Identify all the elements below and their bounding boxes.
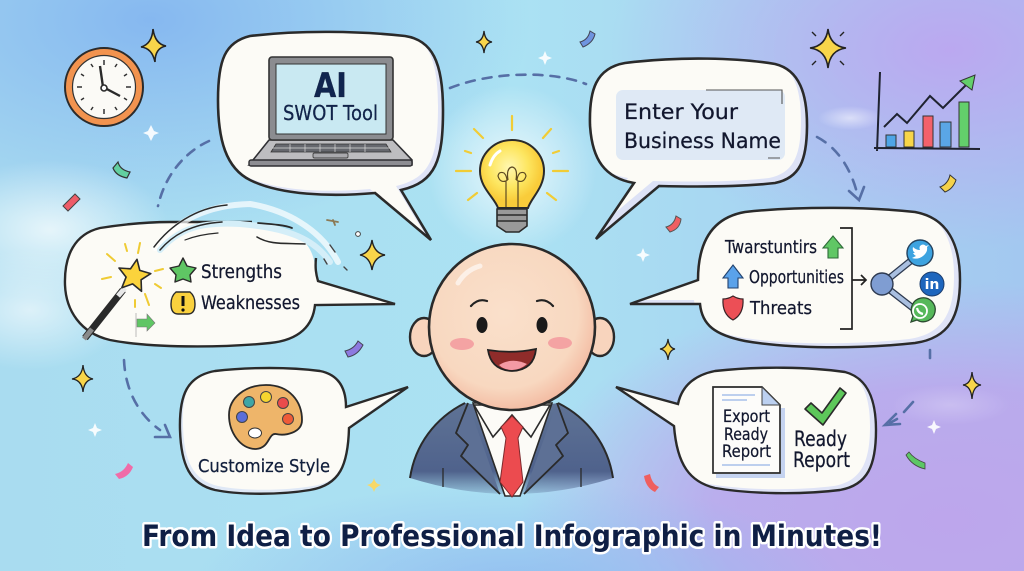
- icon: growth bar chart: [874, 72, 980, 151]
- icon: warning badge: [171, 292, 195, 314]
- face details: [450, 266, 572, 371]
- head: [429, 244, 595, 410]
- magic swoosh: [154, 204, 360, 270]
- label: Weaknesses: Weaknesses: [201, 292, 300, 314]
- label: Threats: Threats: [749, 298, 812, 319]
- icon: linkedin: in: [925, 277, 939, 293]
- panel: Strengths and Weaknesses bubble: [65, 204, 395, 346]
- panel: Export Ready Report bubble: [610, 364, 876, 493]
- panel: SWOT opportunities and threats bubble: [624, 204, 960, 347]
- icon: laptop: [249, 57, 412, 166]
- input field with name prompt: [616, 90, 785, 160]
- panel: Enter Your Business Name bubble: [584, 54, 807, 239]
- icon: share network: [871, 240, 944, 322]
- icon: report document: Export: [723, 407, 770, 427]
- connecting dashed arrows: [124, 75, 930, 437]
- icon: green check mark: [805, 388, 846, 425]
- garbled label text: Twarstuntirs: [724, 237, 817, 258]
- icon: blue up arrow: [723, 265, 743, 288]
- label: Opportunities: Opportunities: [749, 267, 844, 288]
- icon: green star: [170, 258, 196, 282]
- collar and red tie: [474, 405, 550, 497]
- icon: glowing light bulb: [456, 116, 568, 232]
- label: Customize Style: Customize Style: [198, 456, 330, 477]
- decorative sparkles and confetti: [63, 29, 981, 492]
- panel: AI SWOT Tool bubble: [213, 28, 443, 240]
- icon: magic wand with star: [84, 243, 163, 339]
- bracket and arrow: [840, 228, 866, 329]
- label: Strengths: Strengths: [201, 261, 282, 283]
- character: smiling businessman: [410, 244, 614, 497]
- suit jacket: [410, 403, 613, 496]
- label: Ready Report: Report: [793, 448, 850, 472]
- icon: green up arrow: [823, 236, 843, 258]
- title: From Idea to Professional Infographic in Minutes!: [142, 519, 882, 553]
- icon: green arrow flag: [136, 313, 155, 337]
- input field with name prompt: Enter Your: [624, 100, 738, 124]
- icon: report document: [713, 387, 783, 476]
- label: Ready Report: Ready: [794, 427, 847, 451]
- icon: laptop: SWOT Tool: [283, 101, 378, 125]
- icon: twitter: [907, 240, 933, 266]
- icon: report document: Report: [722, 442, 771, 462]
- icon: paint palette: [229, 385, 302, 449]
- panel: Customize Style bubble: [180, 364, 411, 494]
- label: Ready Report: [793, 427, 850, 472]
- icon: report document: Ready: [724, 425, 768, 445]
- input field with name prompt: Business Name: [624, 129, 781, 153]
- ears: [410, 318, 614, 356]
- icon: whatsapp: [911, 298, 935, 322]
- icon: laptop: AI: [314, 66, 347, 106]
- icon: wall clock: [65, 48, 143, 126]
- icon: red shield: [723, 296, 743, 320]
